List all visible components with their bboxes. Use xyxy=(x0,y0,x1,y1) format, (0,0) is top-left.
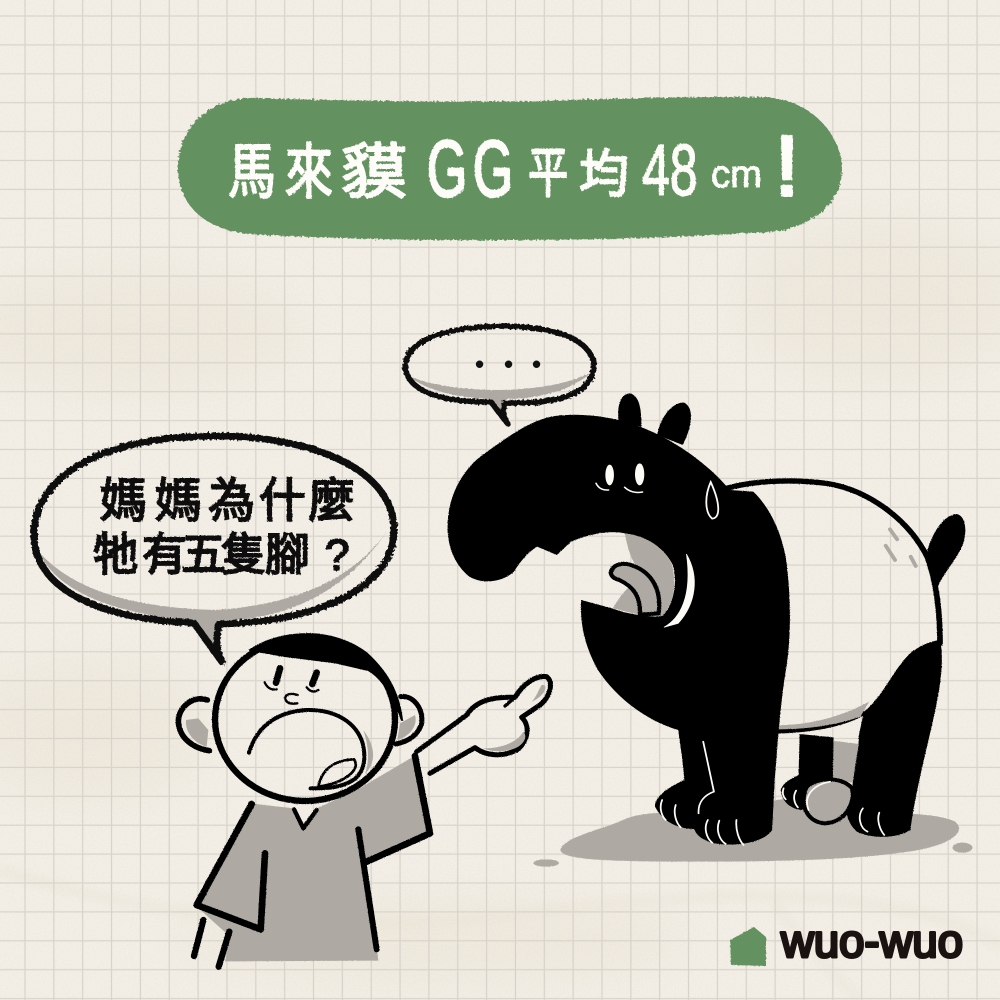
ellipsis dots: • xyxy=(504,349,513,379)
tongue xyxy=(318,759,356,787)
brows and eyes xyxy=(276,668,317,684)
bubble text: 牠有五隻腳 xyxy=(93,529,310,580)
body back and belly outline xyxy=(726,481,940,731)
title text: 貘 xyxy=(341,140,407,206)
tail xyxy=(927,514,965,588)
head xyxy=(215,638,395,801)
title text: 來 xyxy=(285,139,333,206)
brand name: wuo-wuo xyxy=(780,915,963,967)
small speech bubble xyxy=(405,326,594,424)
boy's speech bubble xyxy=(34,436,394,662)
near hind leg xyxy=(846,640,942,837)
back leg grey segment xyxy=(832,741,859,783)
title text: ! xyxy=(775,119,799,213)
grey skin shading xyxy=(186,685,545,774)
leg and claw lines xyxy=(661,742,884,845)
fifth leg xyxy=(804,779,853,823)
belly shading xyxy=(778,702,869,729)
ellipsis dots: • xyxy=(475,349,484,379)
title text: cm xyxy=(711,154,762,196)
ellipsis dots: • xyxy=(532,349,541,379)
banner pill xyxy=(178,97,842,240)
ground shadow xyxy=(533,798,972,867)
legs xyxy=(194,920,229,967)
bubble shading xyxy=(39,530,388,650)
title text: G xyxy=(427,125,467,214)
title text: 馬 xyxy=(228,139,276,206)
title text xyxy=(228,119,799,214)
title banner xyxy=(178,97,842,240)
bubble shading xyxy=(409,372,592,416)
rump specks xyxy=(886,529,916,566)
bubble text: ? xyxy=(325,531,349,580)
title text: G xyxy=(473,125,513,214)
ears xyxy=(618,393,691,445)
sweat drop xyxy=(706,482,718,519)
bubble text: 媽媽為什麼 xyxy=(100,474,355,527)
ears xyxy=(178,699,209,751)
tongue xyxy=(611,564,659,615)
title text: 平 xyxy=(528,143,568,205)
far hind leg xyxy=(781,734,834,810)
boy xyxy=(178,634,550,967)
tapir white details xyxy=(596,463,884,845)
mouth xyxy=(249,710,364,788)
bubble outline xyxy=(34,436,394,662)
bubble text xyxy=(93,474,355,580)
tapir xyxy=(448,393,972,867)
lower mouth xyxy=(613,583,641,615)
icon: green house xyxy=(730,927,766,966)
arm and hand xyxy=(417,676,550,773)
head, trunk, neck and front legs xyxy=(448,415,790,845)
bubble outline xyxy=(405,326,594,424)
title text: 48 xyxy=(642,131,698,211)
eyes xyxy=(605,463,644,485)
smile wrinkles xyxy=(596,483,642,492)
shirt outlines xyxy=(197,804,265,929)
hair xyxy=(250,634,402,720)
title text: 均 xyxy=(579,145,629,203)
shirt fill xyxy=(197,757,430,961)
throat xyxy=(625,533,674,616)
cheek line xyxy=(664,554,694,627)
logo xyxy=(730,915,963,967)
